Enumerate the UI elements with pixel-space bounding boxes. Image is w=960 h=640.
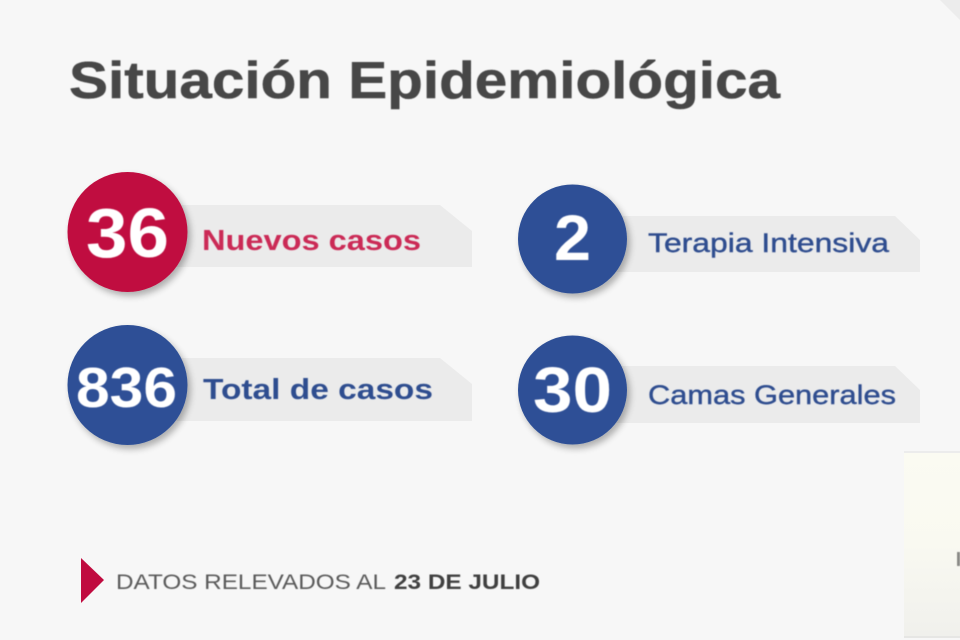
icon: red triangle marker — [81, 558, 104, 603]
number: 30 — [533, 354, 612, 426]
label: Total de casos — [203, 374, 433, 406]
number: 36 — [86, 194, 169, 272]
stat: total de casos — [68, 325, 472, 445]
label bar — [170, 358, 472, 421]
date text bold: 23 DE JULIO — [394, 571, 540, 594]
number: 2 — [554, 202, 591, 274]
stat: terapia intensiva — [518, 184, 920, 294]
number circle — [518, 184, 627, 294]
video inset panel — [904, 451, 960, 638]
label: Camas Generales — [648, 380, 896, 410]
label bar — [170, 205, 472, 267]
label bar — [610, 366, 920, 423]
label: Terapia Intensiva — [648, 228, 890, 258]
footer note — [81, 558, 540, 603]
stat: nuevos casos — [68, 172, 472, 292]
title: Situación Epidemiológica — [69, 52, 781, 110]
label bar — [610, 216, 920, 272]
date text regular: DATOS RELEVADOS AL — [116, 571, 386, 594]
stat: camas generales — [518, 336, 920, 444]
corner accent — [940, 0, 960, 20]
number: 836 — [76, 356, 177, 420]
number circle — [68, 325, 188, 445]
number circle — [518, 336, 627, 444]
label: Nuevos casos — [202, 225, 421, 257]
number circle — [68, 172, 188, 292]
